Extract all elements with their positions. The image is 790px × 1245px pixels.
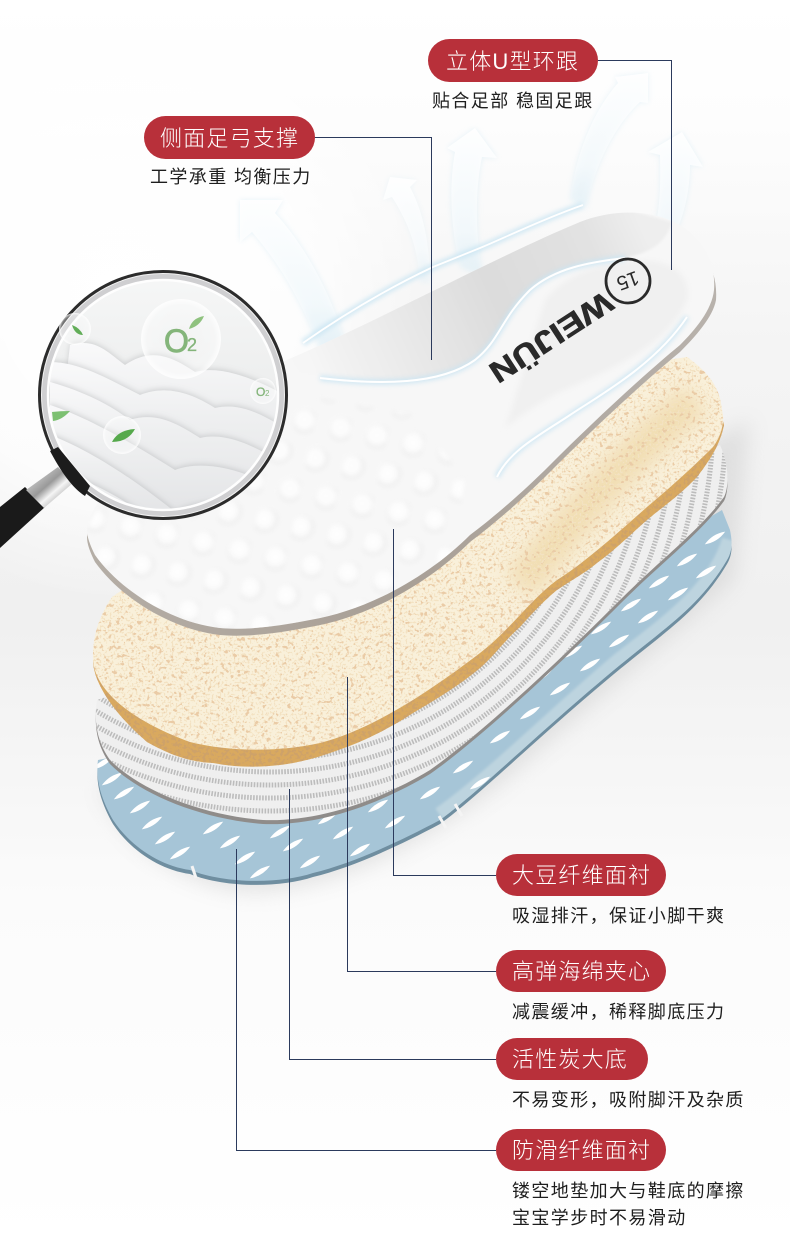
lens ring (44, 276, 282, 514)
callout: arch support: 侧面足弓支撑 (160, 126, 299, 151)
leaf: left (52, 411, 70, 421)
caption: 镂空地垫加大与鞋底的摩擦 (512, 1181, 745, 1201)
callout: U-shaped heel: 立体U型环跟 (446, 49, 579, 74)
glow lines (320, 258, 687, 477)
insole edge (87, 220, 716, 636)
soft shadow beneath insole stack (100, 420, 750, 893)
label pill (496, 1038, 648, 1080)
leaf bubble: upper left (59, 313, 91, 345)
metal connector (26, 467, 73, 508)
callout: U-shaped heel (428, 39, 672, 270)
callout: soybean fibre lining: 大豆纤维面衬 (512, 863, 651, 888)
handle (0, 487, 45, 548)
oxygen bubble: large (141, 299, 221, 379)
callout: activated carbon base: 活性炭大底 (512, 1047, 628, 1072)
lens shadow ring (40, 272, 286, 518)
caption: 工学承重 均衡压力 (150, 167, 312, 187)
oxygen bubble: small: 2 (265, 389, 270, 398)
arrow: centre left (383, 177, 430, 283)
leader line (236, 849, 496, 1150)
leader line (290, 789, 496, 1060)
arrow: far left (240, 200, 347, 350)
notches in outsole edge (192, 804, 462, 878)
callout: activated carbon base (290, 789, 745, 1110)
caption: 吸湿排汗，保证小脚干爽 (512, 906, 725, 926)
caption: 不易变形，吸附脚汗及杂质 (512, 1090, 745, 1110)
magnifying glass (0, 272, 290, 548)
callout: anti-slip fibre lining: 防滑纤维面衬 (512, 1138, 651, 1163)
size badge 15 (606, 259, 650, 303)
layer: soybean fibre top insole (70, 205, 716, 640)
leader line (394, 529, 496, 876)
icon: breathable airflow arrows (240, 73, 703, 350)
massage bumps (96, 552, 450, 628)
black collar (50, 447, 90, 496)
label pill (496, 950, 666, 992)
label pill (496, 854, 666, 896)
callout: anti-slip fibre lining: 宝宝学步时不易滑动 (512, 1208, 687, 1228)
heel cup (505, 261, 688, 428)
upper airflow streak (303, 205, 583, 343)
callout: anti-slip fibre lining (236, 849, 745, 1228)
label pill (496, 1129, 666, 1171)
caption: 贴合足部 稳固足跟 (432, 91, 594, 111)
leader line (348, 677, 496, 972)
arrow: centre (447, 128, 497, 277)
callout: soybean fibre lining (394, 529, 725, 926)
brand logo: WEIJÜN (483, 285, 618, 389)
leader line (315, 138, 432, 360)
callout: high-elastic sponge: 高弹海绵夹心 (512, 959, 651, 984)
oxygen bubble: large: O (164, 323, 189, 359)
layer: high-elastic sponge core (93, 357, 724, 767)
leaf bubble (103, 416, 141, 454)
callout: high-elastic sponge (348, 677, 725, 1022)
arrow: right (637, 132, 703, 263)
oxygen bubble: small (250, 378, 276, 404)
caption: 减震缓冲，稀释脚底压力 (512, 1002, 725, 1022)
oxygen bubble: small: O (256, 385, 265, 399)
label pill (144, 116, 315, 159)
oxygen bubble: large: 2 (187, 335, 197, 355)
layer: blue anti-slip fibre base (91, 510, 732, 885)
arrow: upper right (570, 73, 648, 207)
darker sponge centre band (520, 400, 695, 585)
layer: activated carbon base (96, 445, 728, 824)
insole surface (87, 213, 714, 629)
arch support depression (352, 213, 669, 378)
lighter outer band (440, 540, 730, 815)
size badge 15: 15 (613, 266, 642, 294)
callout: arch support (144, 116, 432, 360)
lens content (49, 339, 276, 508)
label pill (428, 39, 598, 82)
perforation slits (91, 530, 727, 880)
leader line (598, 60, 672, 270)
